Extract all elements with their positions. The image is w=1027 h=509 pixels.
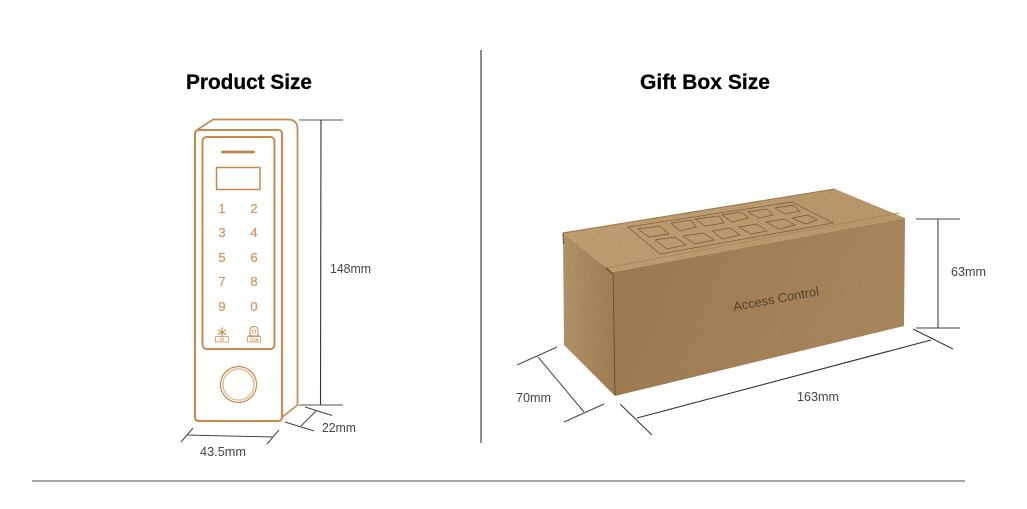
fingerprint reader [220,366,256,402]
keypad digits: 2 [250,201,258,216]
product drawing: access control keypad [195,120,298,421]
bottom divider [32,480,965,482]
keypad digits [218,201,258,314]
keypad digits: 6 [250,250,258,265]
keypad panel [202,137,274,349]
heading: Product Size: Product Size [186,71,312,94]
dimension: 70mm width: 70mm [516,391,551,405]
keypad digits: 8 [250,274,258,289]
center divider [480,50,482,443]
dimension: 22mm depth [285,407,356,435]
star key: M [220,338,224,344]
dimension: 63mm height: 63mm [951,265,986,279]
keypad digits: 5 [218,250,226,265]
dimension: 163mm length [620,329,953,435]
keypad digits: 7 [218,274,226,289]
keypad digits: 1 [218,201,226,216]
dimension: 148mm height: 148mm [330,262,371,276]
bell key [248,326,260,344]
device front outline [195,130,282,421]
box label: Access Control [732,284,820,314]
dimension: 63mm height [916,219,986,328]
box front face [612,218,905,396]
heading: Gift Box Size: Gift Box Size [640,71,770,94]
device side and back outline [197,120,298,418]
gift box photo [563,189,905,396]
keypad digits: 9 [218,299,226,314]
keypad digits: 4 [250,225,258,240]
dimension: 70mm width [516,347,604,422]
keypad print on box lid [628,202,833,254]
box top face [563,189,905,272]
keypad digits: 0 [250,299,258,314]
box left end [563,233,615,396]
box card grain [563,189,905,396]
keypad digits: 3 [218,225,226,240]
bell key: Ox▾ [250,338,259,344]
display window [216,168,260,190]
indicator bar [222,151,254,153]
dimension: 43.5mm width: 43.5mm [200,445,246,459]
dimension: 163mm length: 163mm [797,390,839,404]
dimension: 22mm depth: 22mm [322,421,356,435]
box lid edges [563,189,899,395]
dimension: 43.5mm width [181,428,279,459]
star key [216,328,228,344]
